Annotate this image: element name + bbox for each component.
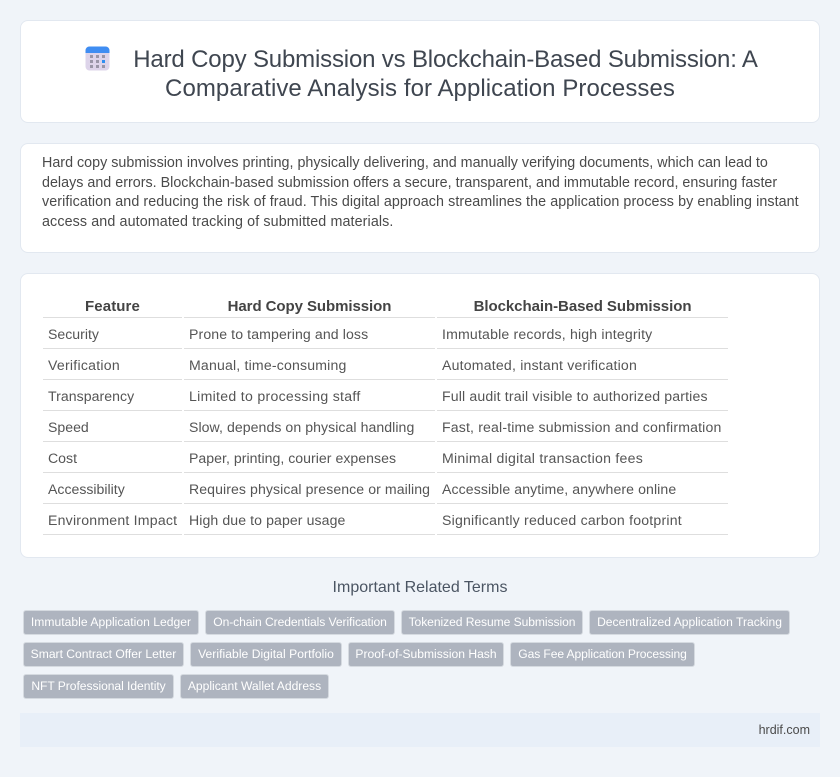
- table row: Environment Impact: Environment Impact: [48, 512, 177, 528]
- table row: Transparency: Full audit trail visible to authorized parties: [442, 388, 708, 404]
- text block: summary: access and automated tracking of submitted materials.: [42, 214, 394, 230]
- table row: Security: [43, 326, 728, 349]
- related term tags: Verifiable Digital Portfolio: [198, 647, 334, 661]
- heading: related terms: Important Related Terms: [333, 579, 507, 596]
- related term tags: Smart Contract Offer Letter: [31, 647, 176, 661]
- table row: Speed: Fast, real-time submission and confirmation: [442, 419, 721, 435]
- table row: Security: Security: [48, 326, 99, 342]
- table row: Cost: Minimal digital transaction fees: [442, 450, 643, 466]
- table row: Cost: Paper, printing, courier expenses: [189, 450, 396, 466]
- table row: Security: Prone to tampering and loss: [189, 326, 368, 342]
- table row: Environment Impact: [43, 512, 728, 535]
- table row: Environment Impact: High due to paper usage: [189, 512, 345, 528]
- table row: Verification: Verification: [48, 357, 120, 373]
- panel: comparison table: [20, 273, 820, 558]
- table row: Cost: [43, 450, 728, 473]
- text block: summary: delays and errors. Blockchain-based submission offers a secure, transparent, and immutable record, ensuring faster: [42, 175, 777, 191]
- table header row: [43, 298, 728, 318]
- panel: title header: [20, 20, 820, 123]
- table row: Transparency: [43, 388, 728, 411]
- table row: Transparency: Limited to processing staff: [189, 388, 361, 404]
- table row: Environment Impact: Significantly reduced carbon footprint: [442, 512, 682, 528]
- table header row: Blockchain-Based Submission: [474, 298, 691, 315]
- text block: summary: Hard copy submission involves printing, physically delivering, and manually verifying documents, which can lead to: [42, 155, 768, 171]
- table row: Speed: Speed: [48, 419, 89, 435]
- title: [133, 46, 758, 102]
- table header row: Feature: [85, 298, 140, 315]
- related term tags: Proof-of-Submission Hash: [355, 647, 497, 661]
- table row: Accessibility: Requires physical presence or mailing: [189, 481, 430, 497]
- table row: Verification: Automated, instant verification: [442, 357, 637, 373]
- footer source text: hrdif.com: [759, 723, 810, 737]
- table row: Cost: Cost: [48, 450, 77, 466]
- table row: Security: Immutable records, high integrity: [442, 326, 652, 342]
- related term tags: [23, 610, 790, 699]
- table row: Accessibility: Accessible anytime, anywhere online: [442, 481, 676, 497]
- table row: Speed: Slow, depends on physical handling: [189, 419, 414, 435]
- related term tags: Decentralized Application Tracking: [597, 615, 782, 629]
- table row: Verification: [43, 357, 728, 380]
- text block: summary: verification and reducing the risk of fraud. This digital approach streamlines the application process by enabling instant: [42, 194, 799, 210]
- footer bar: [20, 713, 820, 747]
- table row: Transparency: Transparency: [48, 388, 134, 404]
- related term tags: Tokenized Resume Submission: [409, 615, 575, 629]
- panel: summary paragraph: [20, 143, 820, 253]
- icon: calendar: [86, 46, 110, 70]
- related term tags: On-chain Credentials Verification: [213, 615, 387, 629]
- related term tags: NFT Professional Identity: [31, 679, 166, 693]
- text block: summary: [42, 155, 799, 230]
- table row: Accessibility: Accessibility: [48, 481, 125, 497]
- title: Comparative Analysis for Application Processes: [165, 75, 675, 102]
- related term tags: Gas Fee Application Processing: [518, 647, 687, 661]
- table row: Accessibility: [43, 481, 728, 504]
- table row: Verification: Manual, time-consuming: [189, 357, 346, 373]
- related term tags: Applicant Wallet Address: [188, 679, 321, 693]
- title: Hard Copy Submission vs Blockchain-Based Submission: A: [133, 46, 758, 73]
- comparison table: [43, 298, 728, 535]
- table header row: Hard Copy Submission: [228, 298, 391, 315]
- table row: Speed: [43, 419, 728, 442]
- related term tags: Immutable Application Ledger: [31, 615, 191, 629]
